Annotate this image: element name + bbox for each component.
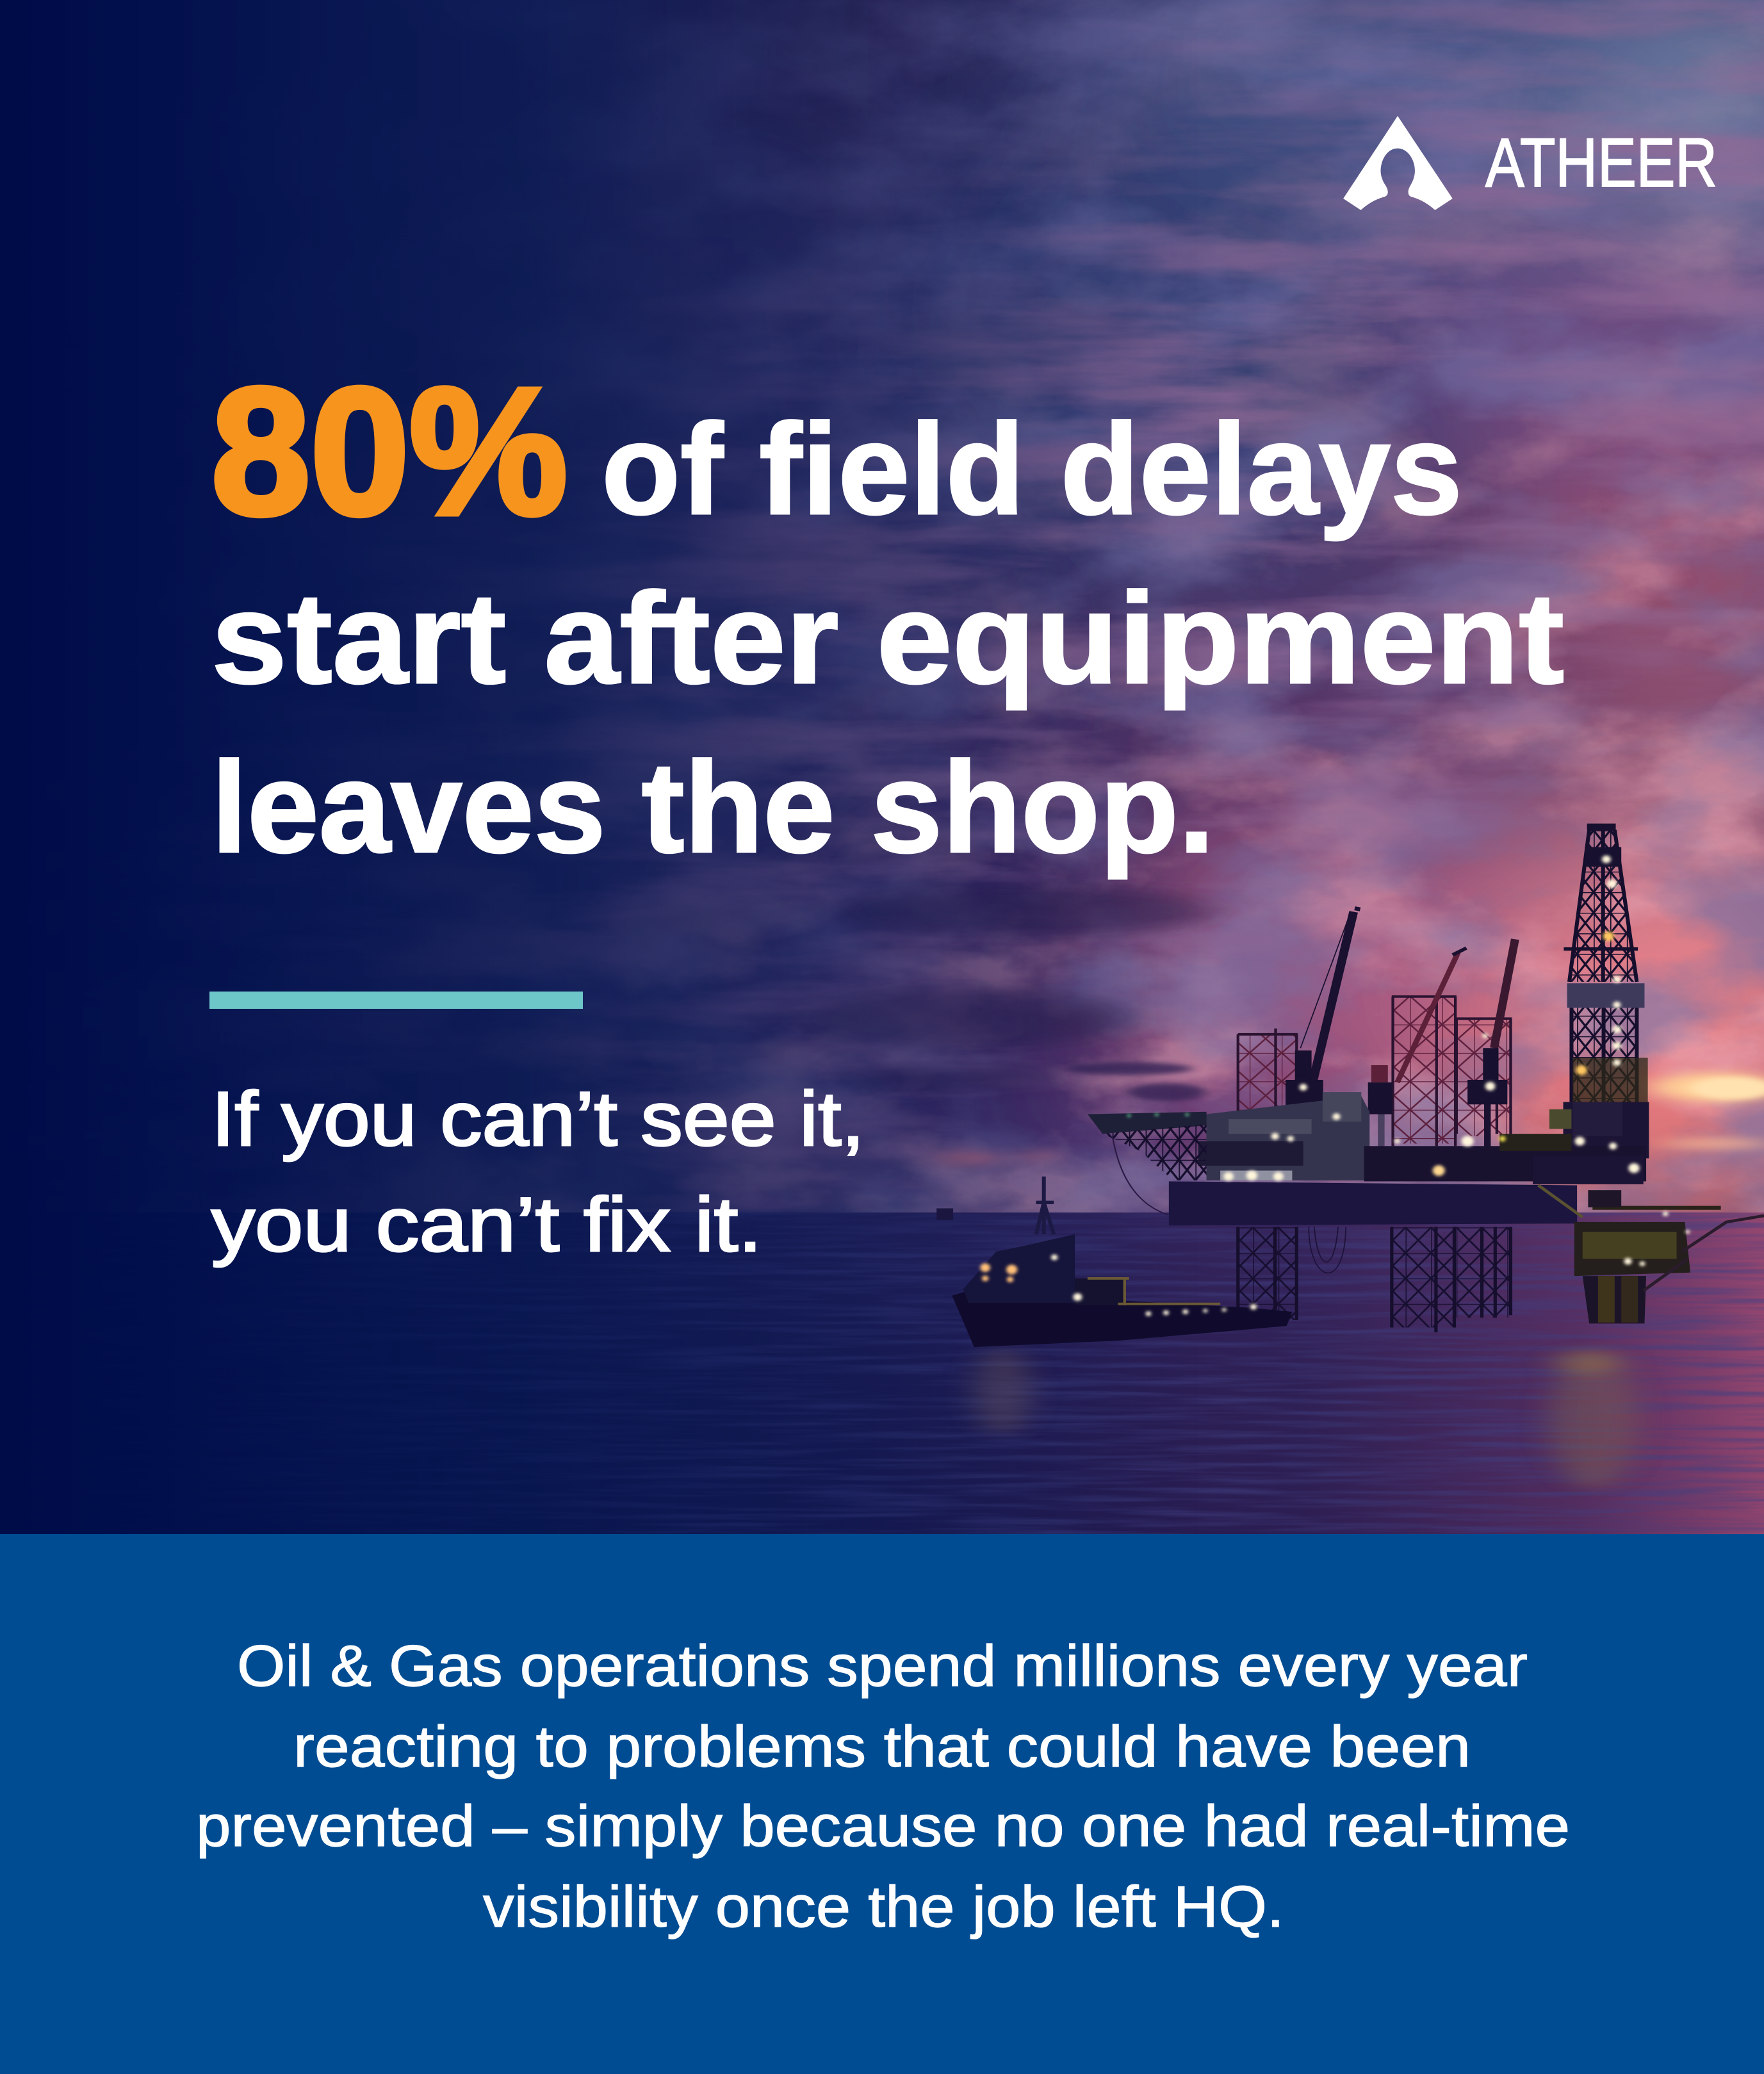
icon: Atheer arrowhead mark [1343, 116, 1453, 210]
background photo: sunset sky and sea [0, 0, 1764, 1534]
distant platform on the horizon [936, 1208, 953, 1220]
crane booms [1300, 908, 1515, 1180]
main hull [1169, 1181, 1577, 1225]
teal accent divider [209, 992, 583, 1009]
headline line 3: leaves the shop. [211, 735, 1214, 879]
sea [582, 1213, 1764, 1534]
dark horizontal cloud bands [803, 886, 1212, 1088]
satellite platform [1539, 1186, 1764, 1323]
red-lit rear leg lattices above deck [1238, 995, 1512, 1146]
cloud texture [0, 0, 1764, 1213]
logo: Atheer [1343, 116, 1717, 210]
illustration: offshore rig and supply vessel [936, 824, 1764, 1347]
panel: blue body copy [0, 1534, 1764, 2074]
legs below deck [1237, 1227, 1510, 1332]
crane cabs [1286, 1048, 1507, 1115]
drilling derrick [1564, 824, 1649, 1158]
logo wordmark: ATHEER [1485, 124, 1717, 201]
supply vessel [952, 1177, 1292, 1347]
headline line 2: start after equipment [211, 566, 1564, 710]
big stat: 80%: 80% [211, 350, 568, 552]
upper deck modules [1198, 1092, 1646, 1184]
rig and vessel lights [980, 855, 1690, 1316]
tagline [211, 1076, 865, 1268]
sky colour washes [743, 0, 1764, 1213]
body paragraph: prevented – simply because no one had real-time [196, 1794, 1570, 1859]
body paragraph [196, 1634, 1570, 1939]
helideck and truss [1088, 1112, 1207, 1214]
sea ripples [0, 1213, 1764, 1534]
navy left fade [0, 0, 1764, 1534]
tagline line 1: If you can’t see it, [211, 1076, 865, 1162]
body paragraph: reacting to problems that could have been [293, 1715, 1471, 1779]
water reflections [974, 1347, 1638, 1489]
tagline line 2: you can’t fix it. [211, 1182, 762, 1268]
body paragraph: Oil & Gas operations spend millions every year [237, 1634, 1528, 1699]
headline line 1: of field delays [601, 396, 1462, 541]
body paragraph: visibility once the job left HQ. [483, 1875, 1284, 1939]
headline [211, 350, 1564, 879]
sun glow on the horizon [938, 1072, 1764, 1165]
